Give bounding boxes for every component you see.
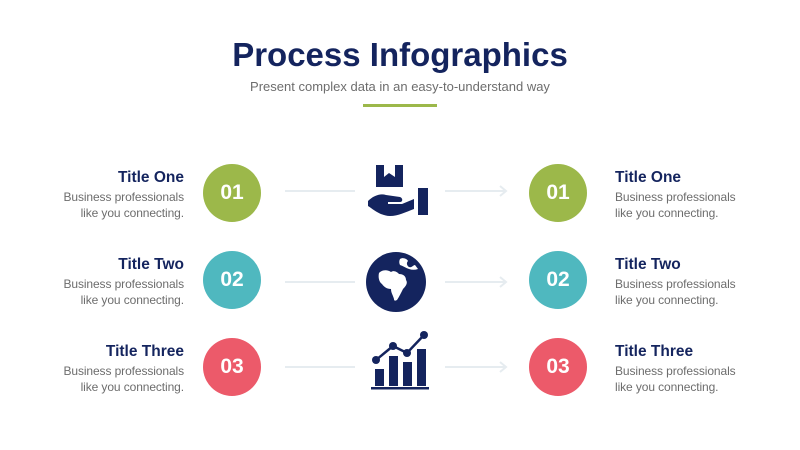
- left text: title two: like you connecting.: [81, 293, 184, 307]
- left text: title three: Title Three: [106, 343, 184, 360]
- left circle 01: [203, 164, 261, 222]
- right text: title two: Business professionals: [615, 277, 736, 291]
- right text: title one: Title One: [615, 169, 681, 186]
- right circle 01: 01: [546, 181, 570, 204]
- title: Process Infographics: [232, 36, 568, 73]
- icon: bar chart: [371, 331, 429, 390]
- right text: title one: Business professionals: [615, 190, 736, 204]
- right text: title two: like you connecting.: [615, 293, 718, 307]
- right text: title one: like you connecting.: [615, 206, 718, 220]
- left circle 02: [203, 251, 261, 309]
- subtitle: Present complex data in an easy-to-understand way: [250, 79, 550, 94]
- left circle 03: [203, 338, 261, 396]
- icon: globe: [366, 252, 426, 312]
- left text: title one: like you connecting.: [81, 206, 184, 220]
- right text: title one: [615, 169, 736, 220]
- left text: title one: Title One: [118, 169, 184, 186]
- left circle 02: 02: [220, 268, 244, 291]
- left text: title one: Business professionals: [63, 190, 184, 204]
- left text: title three: [63, 343, 184, 394]
- right circle 03: 03: [546, 355, 570, 378]
- right circle 02: [529, 251, 587, 309]
- left text: title two: Title Two: [118, 256, 184, 273]
- icon: hand with box: [368, 165, 428, 216]
- left text: title one: [63, 169, 184, 220]
- left text: title three: like you connecting.: [81, 380, 184, 394]
- left circle 03: 03: [220, 355, 244, 378]
- accent underline: [363, 104, 437, 107]
- right text: title two: [615, 256, 736, 307]
- right text: title two: Title Two: [615, 256, 681, 273]
- right text: title three: Title Three: [615, 343, 693, 360]
- right text: title three: like you connecting.: [615, 380, 718, 394]
- right circle 02: 02: [546, 268, 570, 291]
- right circle 03: [529, 338, 587, 396]
- right text: title three: Business professionals: [615, 364, 736, 378]
- left text: title three: Business professionals: [63, 364, 184, 378]
- right text: title three: [615, 343, 736, 394]
- left text: title two: [63, 256, 184, 307]
- left circle 01: 01: [220, 181, 244, 204]
- right circle 01: [529, 164, 587, 222]
- left text: title two: Business professionals: [63, 277, 184, 291]
